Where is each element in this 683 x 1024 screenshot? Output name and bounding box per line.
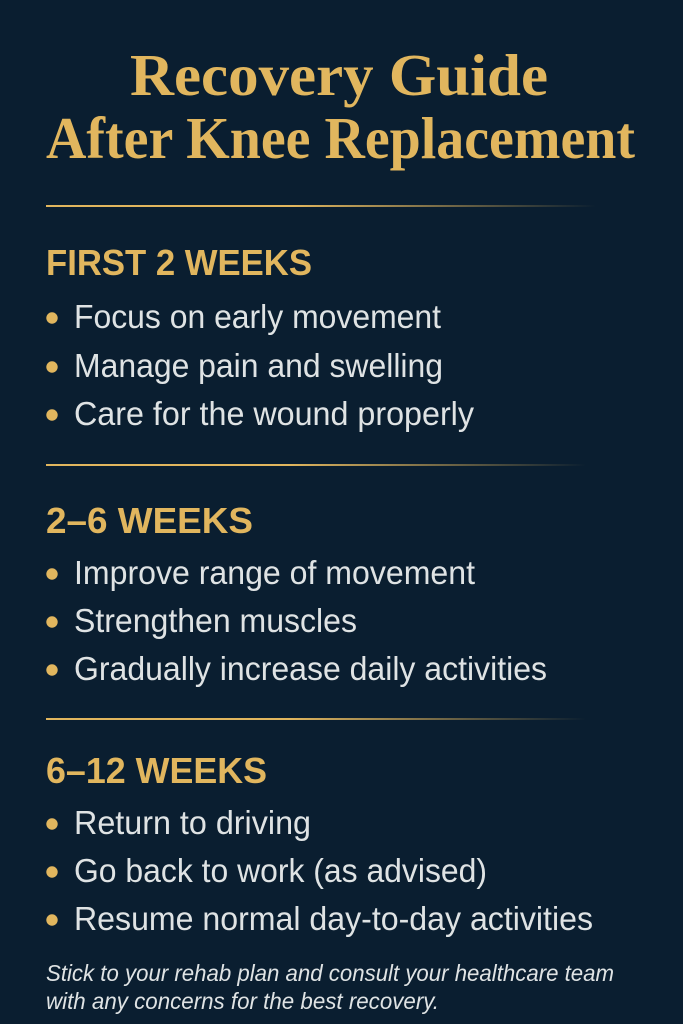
- bullet list: first 2 weeks: [46, 298, 474, 432]
- bullet list: 2-6 weeks: Gradually increase daily activities: [74, 650, 547, 687]
- title: [46, 42, 635, 171]
- heading: 6-12 weeks: 6–12 WEEKS: [46, 750, 267, 791]
- bullet list: first 2 weeks: Manage pain and swelling: [74, 347, 443, 384]
- bullet list: first 2 weeks: Focus on early movement: [74, 298, 441, 335]
- bullet list: 6-12 weeks: [46, 804, 593, 937]
- bullet list: 2-6 weeks: Improve range of movement: [74, 554, 475, 591]
- footer note: [46, 960, 614, 1014]
- title: Recovery Guide: [130, 42, 548, 108]
- bullet list: 2-6 weeks: [46, 554, 547, 687]
- heading: 2-6 weeks: 2–6 WEEKS: [46, 500, 253, 541]
- panel: 6-12 weeks: [46, 750, 593, 937]
- panel: first 2 weeks: [46, 242, 474, 432]
- title: After Knee Replacement: [46, 105, 635, 171]
- footer note: with any concerns for the best recovery.: [46, 988, 439, 1014]
- panel: 2-6 weeks: [46, 500, 547, 687]
- bullet list: 6-12 weeks: Return to driving: [74, 804, 311, 841]
- bullet list: 6-12 weeks: Go back to work (as advised): [74, 852, 487, 889]
- footer note: Stick to your rehab plan and consult your healthcare team: [46, 960, 614, 986]
- heading: first 2 weeks: FIRST 2 WEEKS: [46, 242, 312, 283]
- bullet list: first 2 weeks: Care for the wound properly: [74, 395, 474, 432]
- bullet list: 6-12 weeks: Resume normal day-to-day activities: [74, 900, 593, 937]
- bullet list: 2-6 weeks: Strengthen muscles: [74, 602, 357, 639]
